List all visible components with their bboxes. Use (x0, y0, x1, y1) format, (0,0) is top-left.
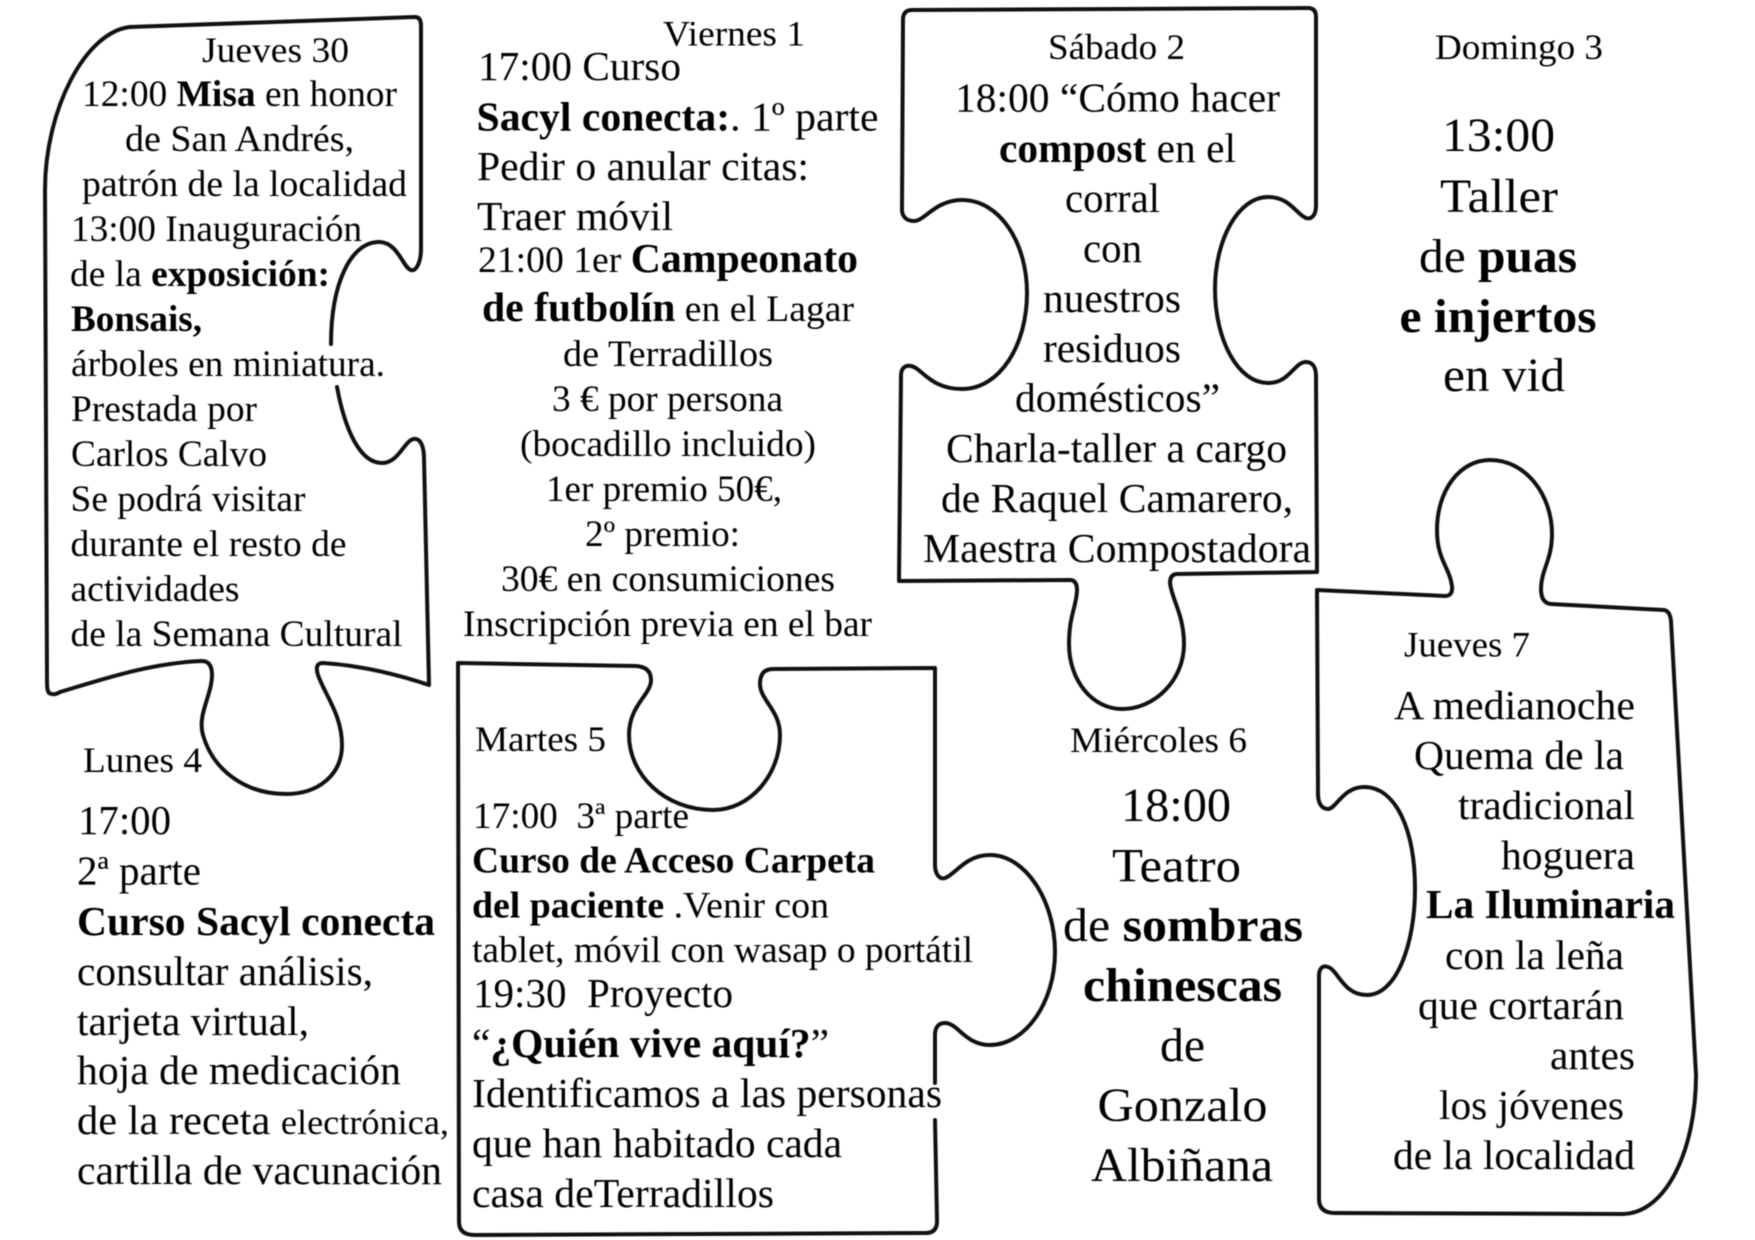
text block: que cortarán (1418, 982, 1624, 1028)
puzzle piece outline (45, 17, 429, 794)
text block: 17:00 3ª parte (473, 796, 689, 837)
text block: Bonsais, (71, 299, 202, 340)
text block: con (1083, 225, 1142, 271)
text block: 17:00 Curso (478, 43, 681, 89)
text block (70, 74, 407, 655)
text block: corral (1065, 175, 1160, 221)
text block: cartilla de vacunación (77, 1147, 442, 1193)
text block: de la localidad (1393, 1132, 1635, 1178)
text block: que han habitado cada (472, 1120, 842, 1166)
text block: del paciente .Venir con (472, 886, 829, 926)
text block (923, 74, 1311, 571)
text block: Curso de Acceso Carpeta (472, 840, 875, 882)
panel: Miércoles 6 (1063, 720, 1303, 1192)
panel: Martes 5 (458, 663, 1055, 1235)
heading: Domingo 3 (1435, 27, 1603, 67)
heading: Miércoles 6 (1070, 720, 1247, 760)
text block (77, 797, 449, 1193)
text block: Pedir o anular citas: (477, 143, 809, 189)
panel: Lunes 4 (77, 740, 449, 1193)
text block: Carlos Calvo (71, 434, 267, 475)
text block: 2ª parte (77, 848, 201, 894)
text block: 19:30 Proyecto (473, 970, 733, 1016)
heading: Lunes 4 (83, 740, 202, 780)
text block: con la leña (1445, 932, 1624, 978)
text block: La Iluminaria (1426, 881, 1675, 927)
text block: 12:00 Misa en honor (82, 74, 397, 115)
text block: de San Andrés, (125, 119, 354, 160)
text block: los jóvenes (1439, 1082, 1624, 1128)
text block: de la receta electrónica, (77, 1097, 449, 1143)
text block: Traer móvil (477, 193, 673, 239)
text block: tarjeta virtual, (77, 998, 309, 1044)
text block: de sombras (1063, 899, 1303, 952)
text block: casa deTerradillos (472, 1170, 774, 1216)
heading: Viernes 1 (663, 14, 805, 54)
text block: Taller (1440, 170, 1558, 223)
panel: Viernes 1 (463, 14, 878, 645)
text block: Se podrá visitar (70, 479, 306, 520)
text block: Quema de la (1414, 732, 1624, 778)
panel: Domingo 3 (1400, 27, 1603, 402)
puzzle piece outline (1317, 460, 1696, 1214)
text block: Gonzalo (1098, 1079, 1268, 1132)
text block: 1er premio 50€, (546, 469, 782, 510)
text block: 13:00 (1442, 109, 1555, 162)
text block: de la exposición: (70, 254, 330, 295)
text block: tablet, móvil con wasap o portátil (472, 930, 973, 971)
text block: 3 € por persona (552, 379, 783, 420)
text block: hoguera (1501, 832, 1635, 878)
panel: Sábado 2 (899, 8, 1317, 709)
text block: consultar análisis, (77, 948, 373, 994)
text block: e injertos (1400, 290, 1596, 343)
text block: Prestada por (71, 389, 257, 430)
text block: nuestros (1043, 275, 1181, 321)
text block: actividades (70, 569, 239, 610)
text block: Albiñana (1091, 1139, 1273, 1192)
text block: Maestra Compostadora (923, 525, 1311, 571)
text block (463, 43, 878, 645)
text block: domésticos” (1015, 374, 1220, 420)
text block: patrón de la localidad (82, 164, 407, 205)
text block: durante el resto de (70, 524, 346, 565)
text block: 17:00 (78, 797, 171, 843)
text block: hoja de medicación (77, 1047, 401, 1093)
text block: Identificamos a las personas (472, 1070, 942, 1116)
text block: (bocadillo incluido) (520, 424, 816, 465)
text block: de la Semana Cultural (70, 614, 402, 655)
heading: Martes 5 (475, 719, 606, 759)
heading: Jueves 30 (202, 30, 349, 70)
text block: 18:00 “Cómo hacer (955, 74, 1280, 120)
text block: de Terradillos (563, 334, 773, 375)
text block: 21:00 1er Campeonato (478, 235, 858, 281)
heading: Jueves 7 (1404, 624, 1530, 664)
puzzle piece outline (458, 663, 1055, 1235)
text block: en vid (1443, 349, 1565, 402)
text block: Charla-taller a cargo (946, 425, 1287, 471)
text block: Inscripción previa en el bar (463, 604, 872, 645)
text block: Curso Sacyl conecta (77, 898, 435, 944)
panel: Jueves 30 (45, 17, 429, 794)
text block: 2º premio: (585, 514, 740, 555)
text block: 18:00 (1121, 779, 1231, 832)
text block: chinescas (1083, 959, 1282, 1012)
text block: de Raquel Camarero, (941, 475, 1293, 521)
text block (472, 796, 973, 1216)
text block: de puas (1419, 230, 1577, 283)
heading: Sábado 2 (1048, 27, 1185, 67)
text block: A medianoche (1394, 682, 1635, 728)
text block: Sacyl conecta:. 1º parte (476, 94, 878, 140)
text block: antes (1550, 1032, 1635, 1078)
puzzle piece outline (899, 8, 1317, 709)
text block: “¿Quién vive aquí?” (472, 1020, 829, 1066)
text block: 13:00 Inauguración (71, 209, 362, 250)
text block: compost en el (999, 125, 1236, 171)
text block (1063, 779, 1303, 1192)
text block: árboles en miniatura. (71, 344, 385, 385)
text block: tradicional (1458, 782, 1635, 828)
text block: 30€ en consumiciones (501, 559, 835, 600)
text block: de futbolín en el Lagar (482, 284, 854, 330)
text block: Teatro (1112, 840, 1241, 892)
panel: Jueves 7 (1317, 460, 1696, 1214)
text block: de (1160, 1019, 1205, 1072)
text block: residuos (1043, 325, 1181, 371)
text block (1393, 682, 1675, 1178)
text block (1400, 109, 1596, 402)
